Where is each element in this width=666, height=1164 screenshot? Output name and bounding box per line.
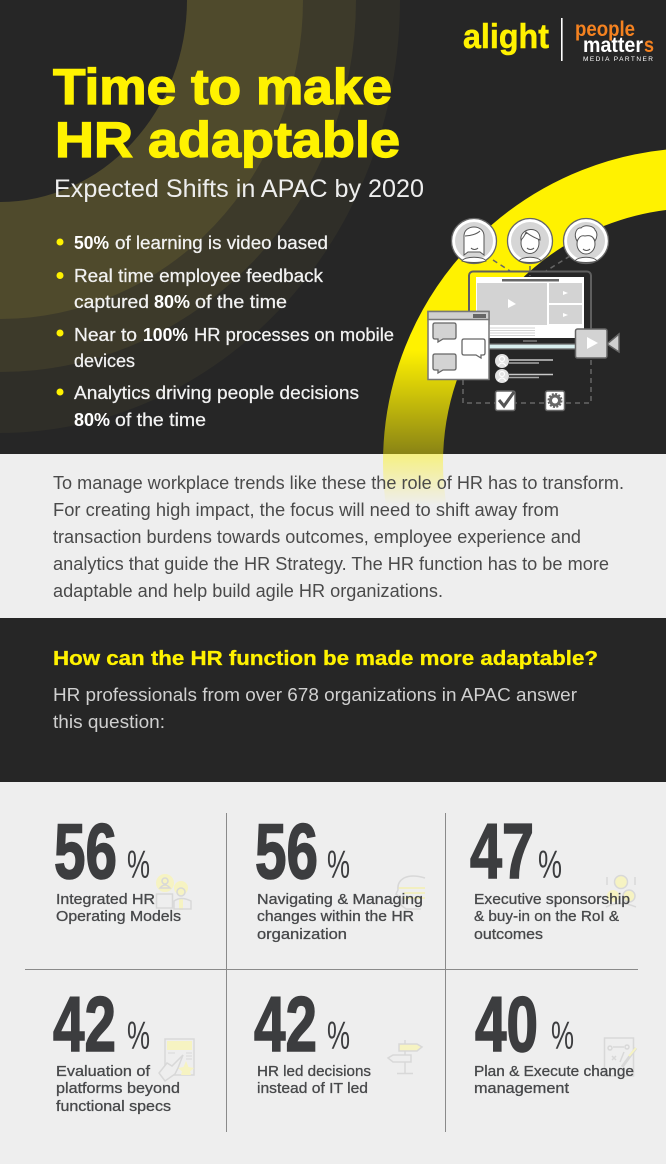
stat: 40% plan and execute change: % bbox=[551, 1015, 574, 1058]
stat: 42% evaluation of platforms: platforms beyond bbox=[56, 1080, 180, 1097]
intro paragraph: transaction burdens towards outcomes, employee experience and bbox=[53, 527, 581, 547]
intro paragraph: adaptable and help build agile HR organizations. bbox=[53, 581, 443, 601]
logos bbox=[463, 18, 654, 63]
connector dashes bbox=[463, 256, 591, 403]
background arc: yellow ring bbox=[383, 150, 666, 501]
logo: people matters bbox=[575, 18, 654, 63]
icon: signpost bbox=[388, 1040, 422, 1074]
stat: 56% navigating and managing changes: organization bbox=[257, 926, 347, 943]
stat: 47% executive sponsorship: 47 bbox=[470, 807, 534, 895]
stat: 42% HR led decisions: HR led decisions bbox=[257, 1063, 371, 1080]
stat: 40% plan and execute change: management bbox=[474, 1080, 570, 1097]
bullet list: expected shifts: Near to bbox=[74, 325, 137, 345]
question description: HR professionals from over 678 organizations in APAC answer bbox=[53, 685, 577, 705]
icon: avatar man curly hair bbox=[564, 218, 608, 264]
stat: 47% executive sponsorship: & buy-in on the RoI & bbox=[474, 908, 619, 925]
stat: 56% navigating and managing changes: % bbox=[327, 844, 350, 887]
bullet list: expected shifts: of the time bbox=[195, 292, 287, 312]
logo divider bbox=[561, 18, 563, 61]
icon: avatar woman bbox=[452, 218, 496, 264]
question description bbox=[53, 685, 577, 732]
stat: 47% executive sponsorship: outcomes bbox=[474, 926, 543, 943]
icon: coins bbox=[606, 876, 636, 907]
stat: 42% evaluation of platforms: 42 bbox=[53, 980, 116, 1068]
background arcs: olive quarter rings bbox=[0, 0, 400, 433]
stat: 56% integrated HR operating models: Operating Models bbox=[56, 908, 181, 925]
bullet list: expected shifts: 100% bbox=[143, 325, 188, 345]
bullet list: expected shifts bbox=[56, 233, 394, 430]
stat: 47% executive sponsorship bbox=[470, 807, 636, 943]
illustration: digital HR platform bbox=[428, 218, 619, 410]
icon: checkbox bbox=[496, 391, 515, 410]
panel: question band bbox=[0, 618, 666, 782]
bullet list: expected shifts: captured bbox=[74, 292, 149, 312]
bullet list: expected shifts: 80% bbox=[154, 292, 190, 312]
stat: 56% integrated HR operating models: Integrated HR bbox=[56, 891, 155, 908]
logo: people matters: MEDIA PARTNER bbox=[583, 56, 653, 63]
title: HR adaptable bbox=[55, 112, 400, 168]
intro paragraph: To manage workplace trends like these the role of HR has to transform. bbox=[53, 473, 624, 493]
stat: 42% evaluation of platforms bbox=[53, 980, 194, 1115]
icon: document with pointing hand bbox=[159, 1039, 194, 1081]
icon: gear bbox=[546, 391, 564, 410]
icon: people and desk bbox=[156, 874, 191, 910]
laptop bbox=[469, 272, 591, 349]
bullet list: expected shifts: Real time employee feedback bbox=[74, 266, 324, 286]
stat: 47% executive sponsorship: % bbox=[538, 844, 562, 887]
stat: 56% integrated HR operating models bbox=[54, 807, 191, 925]
intro paragraph: analytics that guide the HR Strategy. The HR function has to be more bbox=[53, 554, 609, 574]
bullet list: expected shifts: devices bbox=[74, 351, 135, 371]
stat: 47% executive sponsorship: Executive sponsorship bbox=[474, 891, 630, 908]
question description: this question: bbox=[53, 712, 165, 732]
bullet list: expected shifts: HR processes on mobile bbox=[194, 325, 394, 345]
stat: 42% HR led decisions bbox=[254, 980, 422, 1097]
logo: people matters: s bbox=[644, 34, 654, 57]
stat: 42% HR led decisions: instead of IT led bbox=[257, 1080, 368, 1097]
stat: 42% HR led decisions: % bbox=[327, 1015, 350, 1058]
stat: 56% integrated HR operating models: % bbox=[127, 844, 150, 887]
question heading: How can the HR function be made more adaptable? bbox=[53, 647, 598, 670]
user rows bbox=[495, 354, 553, 383]
stat: 56% navigating and managing changes: Navigating & Managing bbox=[257, 891, 423, 908]
title bbox=[53, 59, 400, 168]
logo: people matters: people bbox=[575, 18, 635, 41]
icon: head silhouette bbox=[396, 876, 425, 909]
subtitle: Expected Shifts in APAC by 2020 bbox=[54, 175, 424, 203]
bullet list: expected shifts: 80% bbox=[74, 410, 110, 430]
chat window bbox=[428, 312, 489, 380]
bullet list: expected shifts: of the time bbox=[115, 410, 206, 430]
stats grid lines bbox=[25, 813, 638, 1132]
icon: strategy plan bbox=[604, 1038, 636, 1076]
intro paragraph bbox=[53, 473, 624, 601]
stat: 42% evaluation of platforms: functional specs bbox=[56, 1098, 171, 1115]
icon: video camera bbox=[576, 329, 619, 358]
bullet list: expected shifts: 50% bbox=[74, 233, 109, 253]
stat: 56% integrated HR operating models: 56 bbox=[54, 807, 117, 895]
stat: 42% evaluation of platforms: Evaluation of bbox=[56, 1063, 151, 1080]
intro paragraph: For creating high impact, the focus will need to shift away from bbox=[53, 500, 559, 520]
bullet list: expected shifts: of learning is video based bbox=[115, 233, 328, 253]
logo: alight: alight bbox=[463, 18, 549, 56]
icon: avatar man with headset bbox=[508, 218, 552, 264]
stat: 42% HR led decisions: 42 bbox=[254, 980, 317, 1068]
stat: 40% plan and execute change: Plan & Execute change bbox=[474, 1063, 634, 1080]
panel: dark hero background bbox=[0, 0, 666, 454]
stat: 40% plan and execute change: 40 bbox=[475, 980, 538, 1068]
title: Time to make bbox=[53, 59, 392, 115]
bullet list: expected shifts: Analytics driving people decisions bbox=[74, 383, 359, 403]
stat: 40% plan and execute change bbox=[474, 980, 636, 1097]
stat: 42% evaluation of platforms: % bbox=[127, 1015, 150, 1058]
logo: people matters: matter bbox=[583, 34, 643, 57]
stat: 56% navigating and managing changes: 56 bbox=[255, 807, 318, 895]
stat: 56% navigating and managing changes: changes within the HR bbox=[257, 908, 414, 925]
stat: 56% navigating and managing changes bbox=[255, 807, 425, 943]
